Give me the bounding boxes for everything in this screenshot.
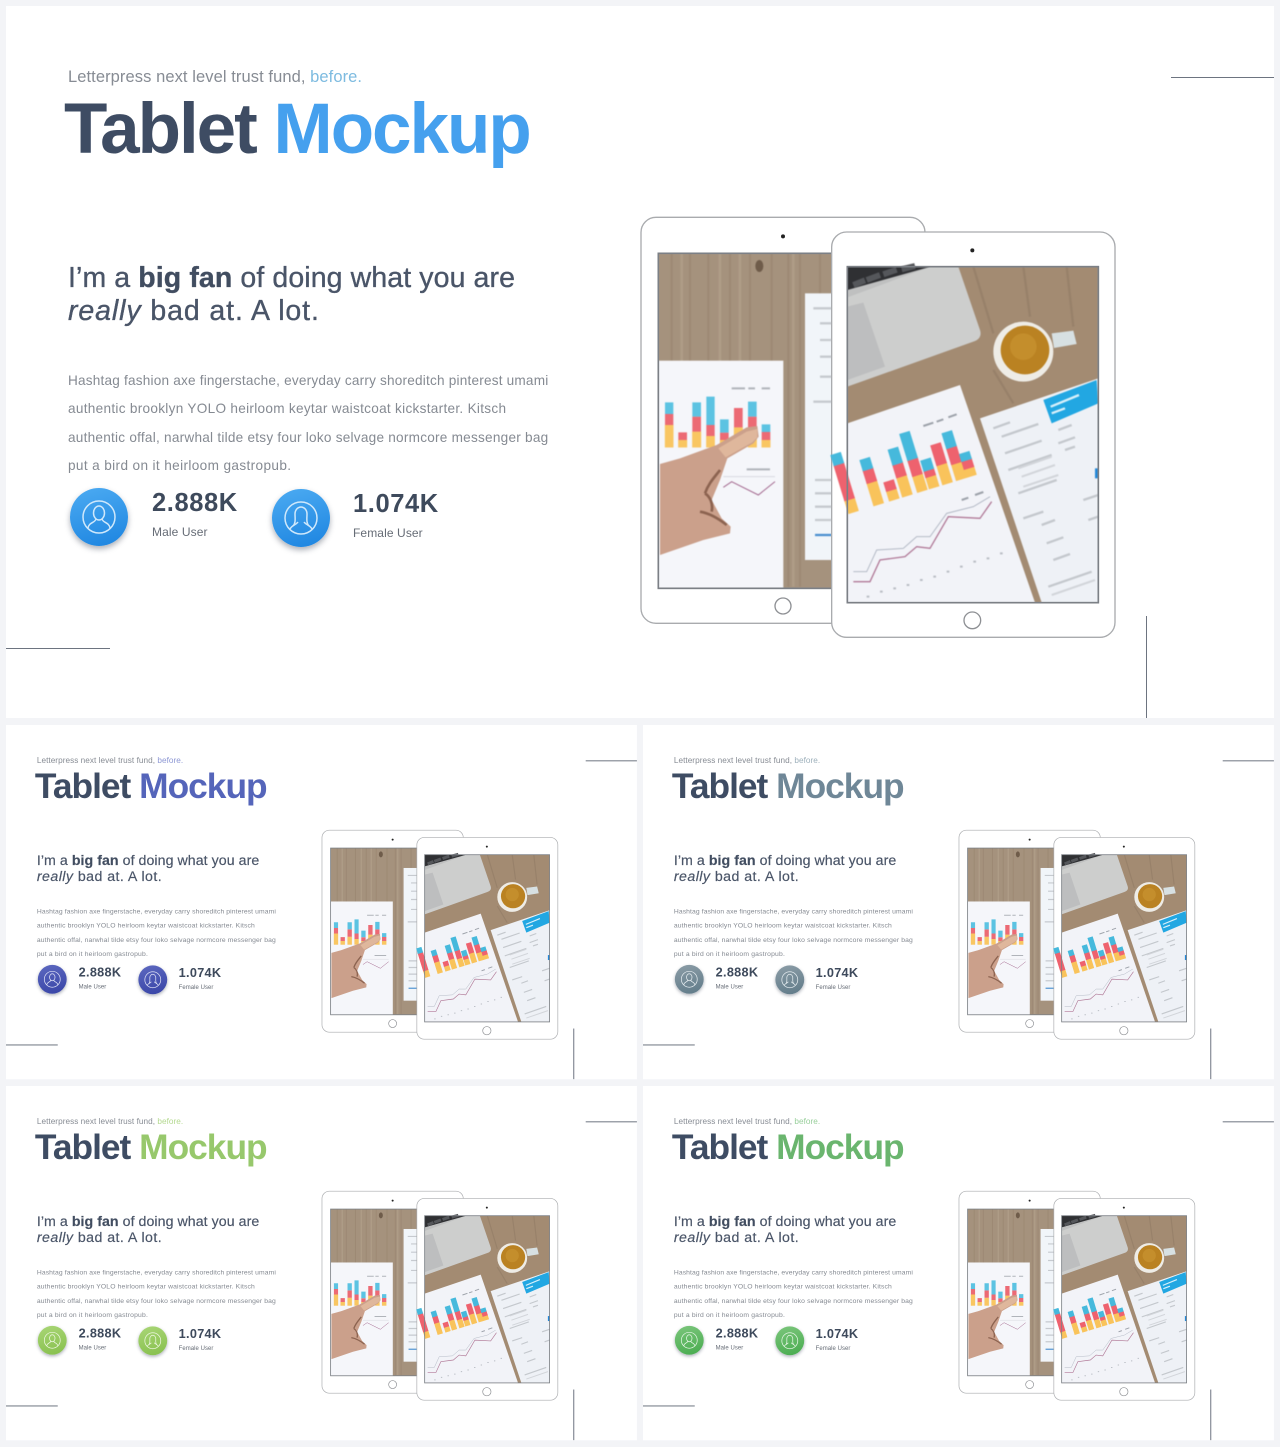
stat: male users: Male User: [79, 1344, 106, 1351]
body text: [37, 908, 276, 958]
stat: male users: Male User: [152, 525, 208, 539]
body text: authentic offal, narwhal tilde etsy four loko selvage normcore messenger bag: [37, 1297, 276, 1304]
stat: male users: [79, 1326, 121, 1351]
body text: authentic brooklyn YOLO heirloom keytar waistcoat kickstarter. Kitsch: [37, 922, 255, 929]
stat: female users: [816, 1327, 858, 1352]
stat: female users: [179, 1327, 221, 1352]
panel: main slide, blue: [6, 6, 1274, 718]
tablets with photos: [640, 216, 1116, 638]
stat: female users: Female User: [353, 526, 423, 540]
headline: [37, 852, 259, 885]
subtitle: Letterpress next level trust fund, before.: [68, 68, 362, 86]
body text: Hashtag fashion axe fingerstache, everyday carry shoreditch pinterest umami: [674, 1269, 913, 1276]
headline: [674, 1213, 896, 1246]
icon: female user: [138, 1326, 167, 1355]
stat: female users: [179, 966, 221, 991]
body text: Hashtag fashion axe fingerstache, everyday carry shoreditch pinterest umami: [68, 373, 548, 388]
body text: Hashtag fashion axe fingerstache, everyday carry shoreditch pinterest umami: [674, 908, 913, 915]
subtitle: Letterpress next level trust fund, before.: [674, 1117, 820, 1126]
headline: I’m a big fan of doing what you are: [674, 852, 896, 868]
panel: lime slide: [6, 1086, 637, 1440]
headline: [674, 852, 896, 885]
stat: male users: Male User: [79, 983, 106, 990]
headline: really bad at. A lot.: [37, 869, 162, 885]
body text: authentic offal, narwhal tilde etsy four loko selvage normcore messenger bag: [68, 430, 548, 445]
stat: male users: 2.888K: [716, 1326, 758, 1340]
stat: male users: [79, 965, 121, 990]
stat: female users: 1.074K: [179, 966, 221, 980]
subtitle: Letterpress next level trust fund, before.: [37, 756, 183, 765]
stat: male users: 2.888K: [716, 965, 758, 979]
stat: male users: [152, 489, 238, 539]
stat: female users: Female User: [816, 984, 850, 991]
body text: put a bird on it heirloom gastropub.: [674, 950, 785, 957]
stat: male users: Male User: [716, 983, 743, 990]
headline: really bad at. A lot.: [674, 869, 799, 885]
icon: male user: [675, 965, 704, 994]
icon: female user: [138, 965, 167, 994]
body text: authentic offal, narwhal tilde etsy four loko selvage normcore messenger bag: [37, 936, 276, 943]
body text: Hashtag fashion axe fingerstache, everyday carry shoreditch pinterest umami: [37, 908, 276, 915]
body text: authentic brooklyn YOLO heirloom keytar waistcoat kickstarter. Kitsch: [37, 1283, 255, 1290]
stat: female users: 1.074K: [179, 1327, 221, 1341]
title: Tablet Mockup: [35, 1128, 267, 1167]
tablets with photos: [958, 830, 1196, 1040]
body text: put a bird on it heirloom gastropub.: [37, 950, 148, 957]
headline: [37, 1213, 259, 1246]
icon: male user: [38, 965, 67, 994]
icon: male user: [675, 1326, 704, 1355]
panel: green slide: [643, 1086, 1274, 1440]
stat: male users: 2.888K: [79, 965, 121, 979]
title: Tablet Mockup: [35, 767, 267, 806]
tablets with photos: [322, 830, 558, 1040]
stat: female users: 1.074K: [816, 1327, 858, 1341]
stat: female users: Female User: [179, 1345, 213, 1352]
body text: put a bird on it heirloom gastropub.: [68, 458, 291, 473]
stat: male users: 2.888K: [152, 489, 238, 517]
icon: male user: [70, 488, 128, 546]
body text: put a bird on it heirloom gastropub.: [674, 1311, 785, 1318]
body text: authentic brooklyn YOLO heirloom keytar waistcoat kickstarter. Kitsch: [68, 401, 506, 416]
headline: I’m a big fan of doing what you are: [37, 1213, 259, 1229]
body text: [68, 373, 548, 473]
title: Tablet Mockup: [672, 1128, 904, 1167]
headline: I’m a big fan of doing what you are: [68, 262, 515, 294]
body text: [674, 1269, 913, 1318]
body text: [37, 1269, 276, 1318]
headline: really bad at. A lot.: [68, 295, 320, 327]
headline: really bad at. A lot.: [674, 1230, 799, 1246]
icon: female user: [272, 489, 330, 547]
stat: female users: 1.074K: [353, 490, 439, 518]
tablets with photos: [958, 1190, 1196, 1400]
subtitle: Letterpress next level trust fund, before.: [37, 1117, 183, 1126]
headline: [68, 262, 515, 327]
body text: authentic brooklyn YOLO heirloom keytar waistcoat kickstarter. Kitsch: [674, 922, 892, 929]
body text: Hashtag fashion axe fingerstache, everyday carry shoreditch pinterest umami: [37, 1269, 276, 1276]
title: Tablet Mockup: [672, 767, 904, 806]
headline: I’m a big fan of doing what you are: [674, 1213, 896, 1229]
headline: I’m a big fan of doing what you are: [37, 852, 259, 868]
body text: authentic brooklyn YOLO heirloom keytar waistcoat kickstarter. Kitsch: [674, 1283, 892, 1290]
stat: female users: Female User: [816, 1345, 850, 1352]
stat: female users: [816, 966, 858, 991]
icon: female user: [775, 965, 804, 994]
stat: female users: [353, 490, 439, 540]
stat: male users: [716, 965, 758, 990]
body text: put a bird on it heirloom gastropub.: [37, 1311, 148, 1318]
subtitle: Letterpress next level trust fund, before.: [674, 756, 820, 765]
icon: male user: [38, 1326, 67, 1355]
headline: really bad at. A lot.: [37, 1230, 162, 1246]
stat: male users: 2.888K: [79, 1326, 121, 1340]
body text: authentic offal, narwhal tilde etsy four loko selvage normcore messenger bag: [674, 1297, 913, 1304]
body text: authentic offal, narwhal tilde etsy four loko selvage normcore messenger bag: [674, 936, 913, 943]
stat: male users: [716, 1326, 758, 1351]
stat: female users: 1.074K: [816, 966, 858, 980]
icon: female user: [775, 1326, 804, 1355]
tablets with photos: [322, 1190, 558, 1400]
title: Tablet Mockup: [64, 90, 530, 169]
body text: [674, 908, 913, 958]
panel: slate slide: [643, 725, 1274, 1079]
panel: indigo slide: [6, 725, 637, 1079]
stat: male users: Male User: [716, 1344, 743, 1351]
stat: female users: Female User: [179, 984, 213, 991]
